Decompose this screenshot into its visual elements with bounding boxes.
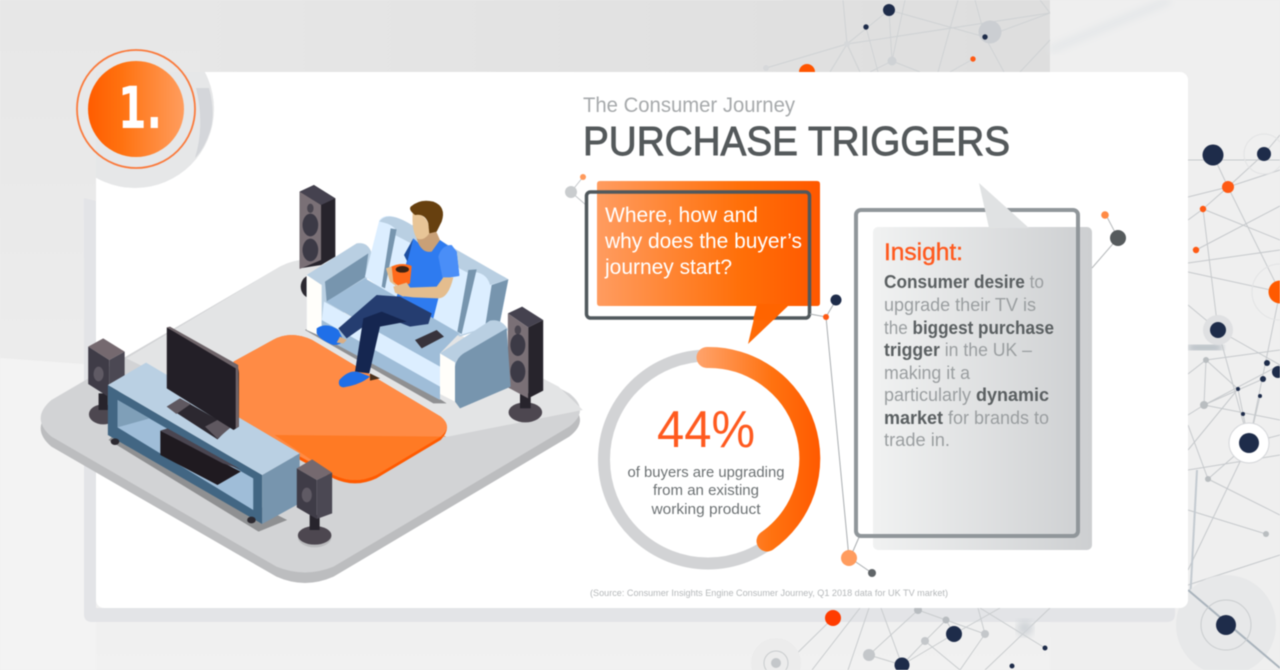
insight body: particularly dynamic	[884, 385, 1049, 405]
question text: journey start?	[604, 256, 732, 279]
rug	[234, 335, 447, 483]
white card	[96, 72, 1188, 608]
network: top	[763, 0, 1050, 80]
illustration: living room	[41, 185, 583, 583]
insight body: Consumer desire to	[884, 272, 1044, 292]
node cluster: right of insight	[1092, 211, 1126, 268]
network: right	[1176, 134, 1280, 670]
card shadow	[84, 198, 1175, 622]
platform	[41, 260, 583, 583]
insight body: trade in.	[884, 430, 950, 450]
question text: Where, how and	[605, 204, 758, 227]
sofa	[305, 216, 511, 408]
donut caption: from an existing	[653, 483, 759, 499]
donut caption: of buyers are upgrading	[628, 465, 784, 481]
donut caption: working product	[650, 502, 760, 518]
man on sofa	[317, 201, 459, 387]
donut chart: 44%	[604, 356, 812, 564]
tv stand	[108, 363, 300, 532]
question text: why does the buyer’s	[604, 230, 802, 253]
speaker: left small	[88, 338, 125, 424]
subtitle: The Consumer Journey	[583, 94, 795, 117]
percentage: 44%	[657, 401, 755, 459]
badge: step number: 1.	[118, 74, 162, 142]
insight body: making it a	[884, 363, 971, 383]
node lines: centre	[810, 294, 876, 577]
node cluster: top-left of question box	[565, 174, 586, 205]
insight panel	[873, 227, 1092, 550]
question callout	[586, 181, 820, 344]
insight callout	[856, 183, 1092, 550]
speaker: back left	[300, 185, 335, 299]
television	[167, 327, 239, 439]
insight body: the biggest purchase	[884, 318, 1054, 338]
question text	[604, 204, 802, 279]
source note: (Source: Consumer Insights Engine Consumer Journey, Q1 2018 data for UK TV market)	[590, 588, 948, 599]
badge: step number	[75, 48, 214, 188]
insight body: trigger in the UK –	[884, 340, 1032, 360]
donut caption	[628, 465, 784, 518]
title block	[583, 94, 1010, 164]
insight body	[884, 272, 1054, 450]
insight body: market for brands to	[884, 408, 1049, 428]
insight body: upgrade their TV is	[884, 295, 1036, 315]
orange box with tail	[597, 181, 820, 344]
speaker: back right	[508, 307, 543, 422]
main heading: PURCHASE TRIGGERS	[583, 118, 1010, 164]
network: bottom	[751, 606, 1050, 670]
insight heading: Insight:	[884, 239, 963, 266]
speaker: front small	[297, 459, 332, 547]
